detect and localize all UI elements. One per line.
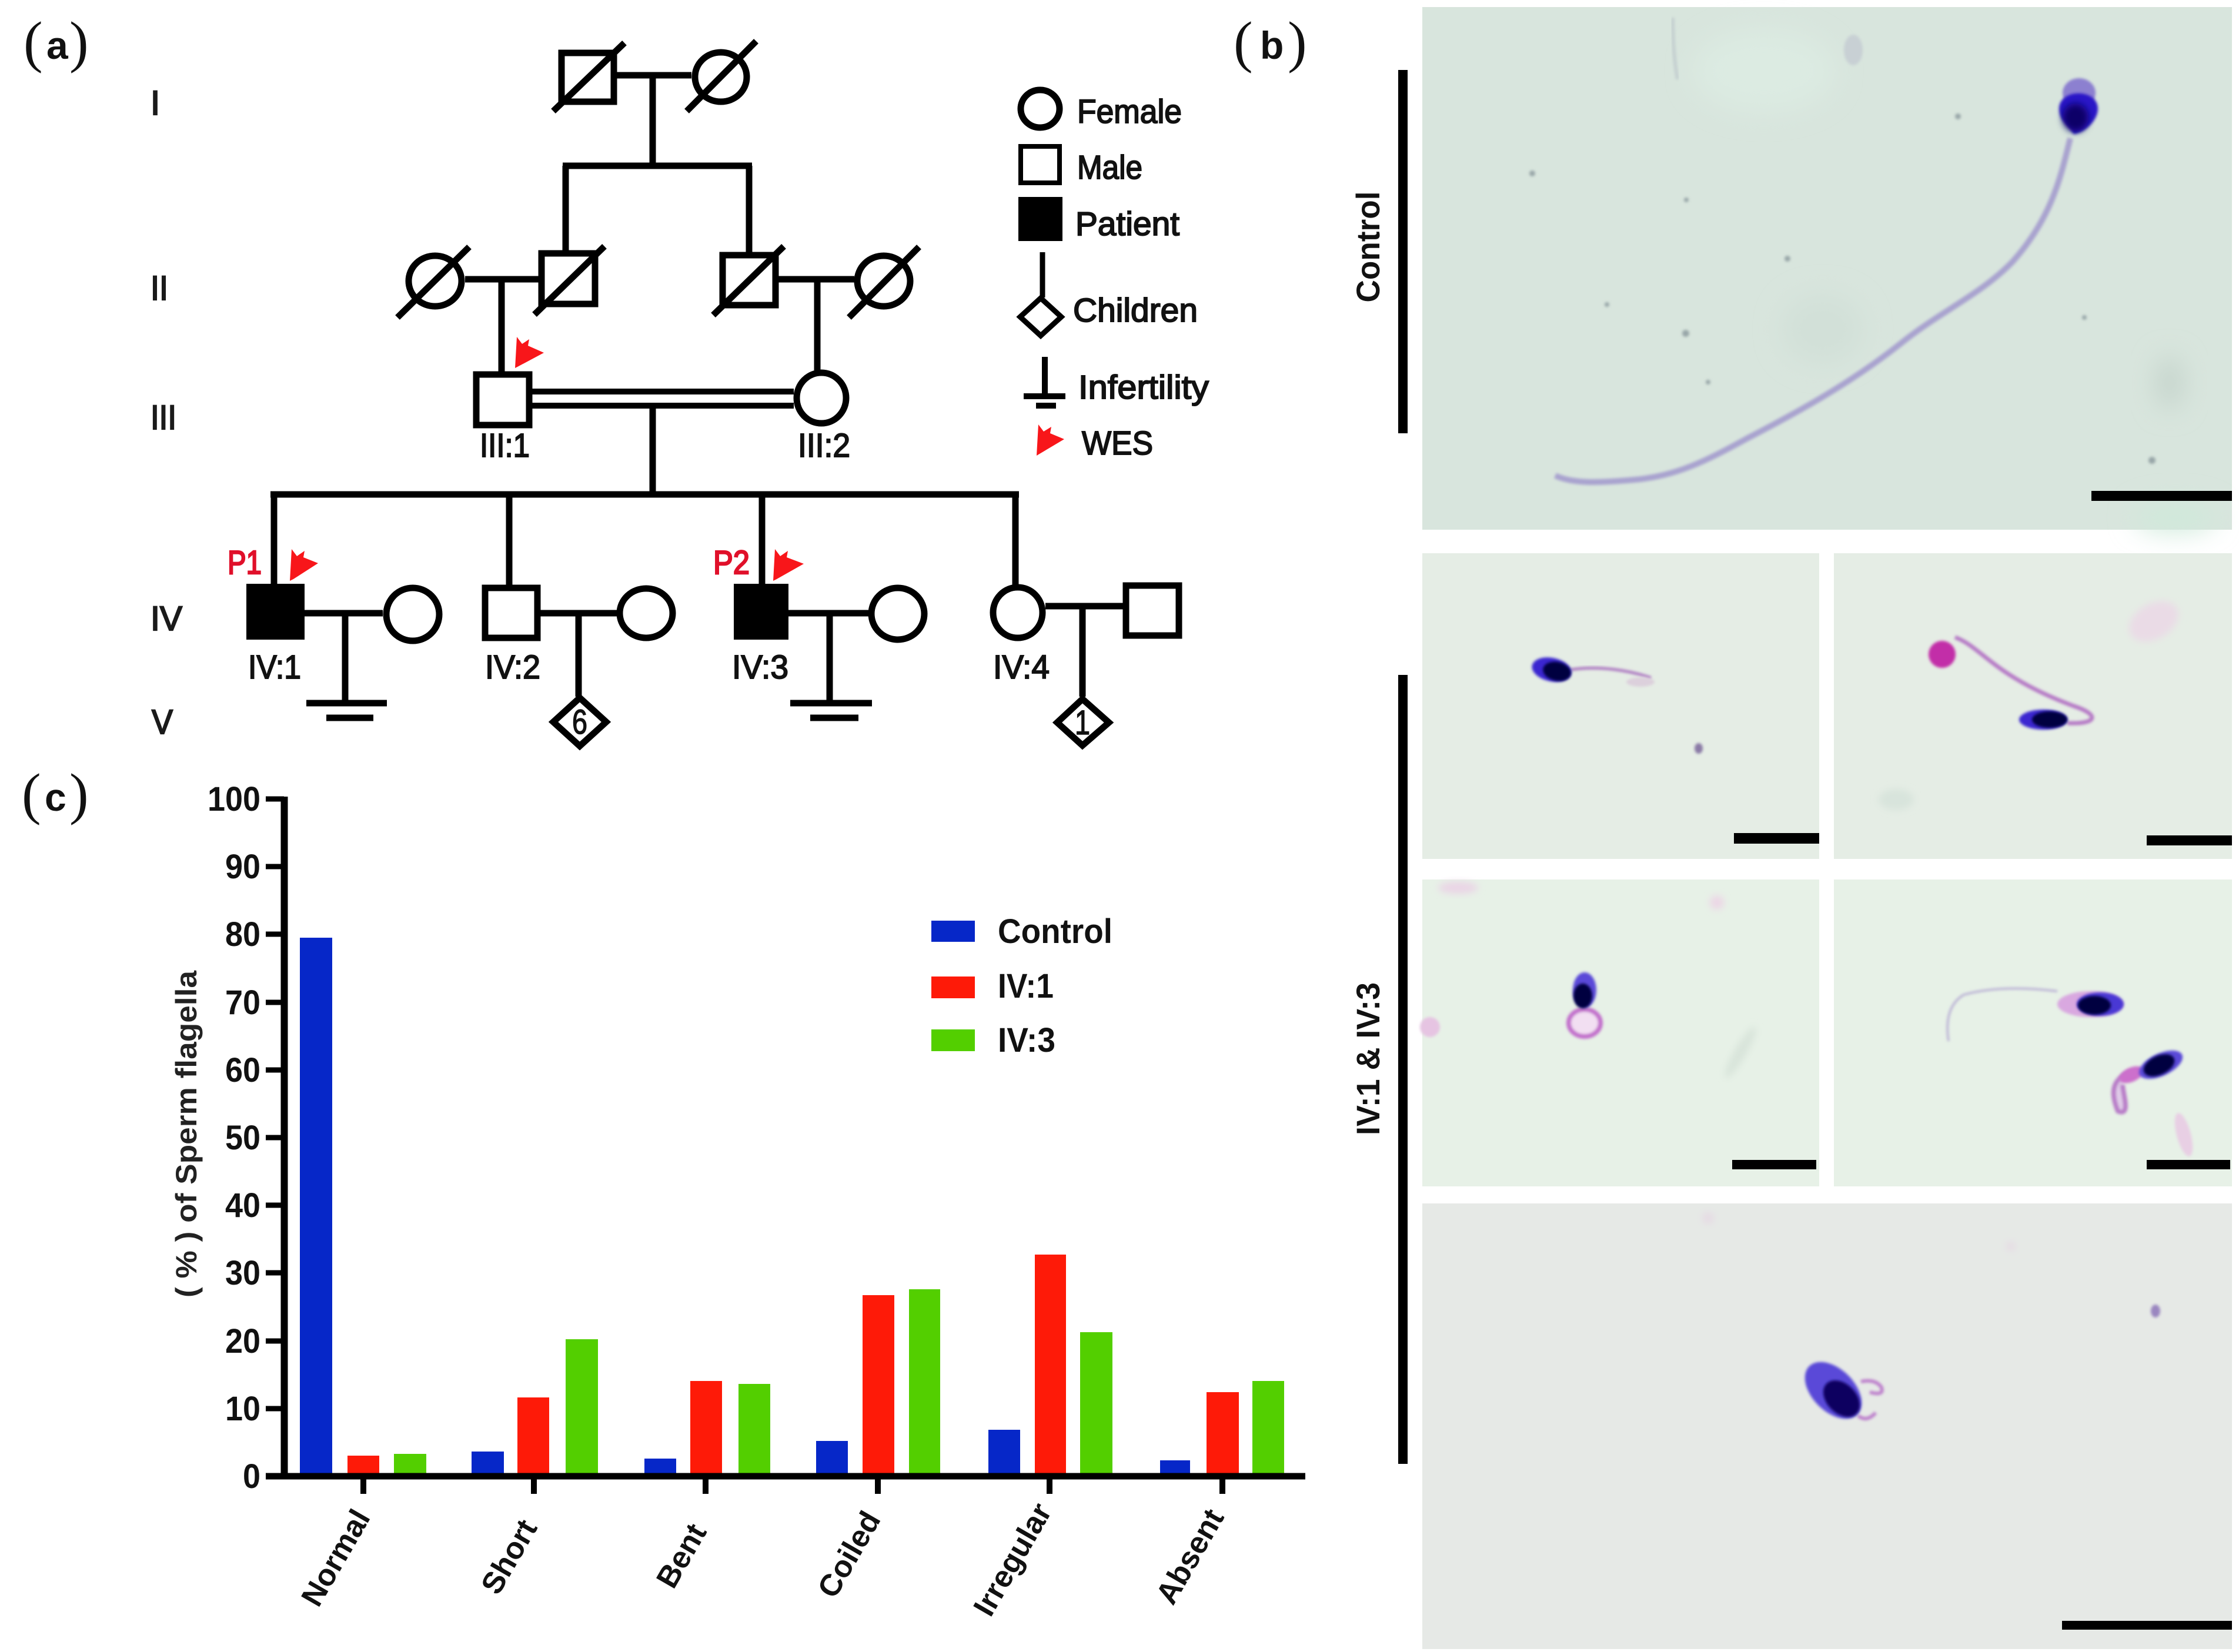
panel label (c): ) [69, 763, 89, 826]
children diamond 6 [553, 698, 606, 746]
individual labels: IV:2 [485, 648, 540, 686]
category labels: Bent [650, 1518, 713, 1594]
legend: control: Control [998, 912, 1112, 951]
chart legend [931, 912, 1112, 1059]
connecting lines [270, 75, 1123, 718]
y tick labels: 90 [225, 848, 260, 886]
group label: patients: IV:1 & IV:3 [1349, 982, 1386, 1135]
panel label (a): a [46, 24, 69, 67]
legend: children: Children [1073, 292, 1198, 329]
individual labels: IV:3 [732, 648, 788, 686]
category labels [295, 1497, 1231, 1622]
pedigree legend [1018, 90, 1209, 462]
legend: IV:1 [931, 967, 1054, 1005]
panel label (b): ) [1288, 11, 1307, 74]
proband labels P1 P2: P1 [228, 544, 262, 581]
individual labels: IV:4 [993, 648, 1050, 686]
generation labels: II [151, 269, 168, 307]
panel label (c): ( [22, 763, 41, 826]
bars: IV:1 [347, 1255, 1239, 1476]
y tick labels: 30 [225, 1254, 260, 1292]
y tick labels: 80 [225, 915, 260, 954]
micrograph: irregular flagella [1834, 879, 2232, 1186]
category labels: Normal [295, 1504, 377, 1612]
children diamond 6: 6 [572, 703, 587, 741]
children diamond 1 [1057, 699, 1109, 745]
panel label (a): ( [24, 11, 43, 74]
legend: infertility [1024, 357, 1209, 406]
y tick labels: 100 [208, 780, 260, 818]
legend: male [1021, 146, 1142, 186]
axes and ticks [266, 797, 1305, 1494]
category labels: Coiled [811, 1506, 887, 1604]
micrograph: control normal sperm [1422, 7, 2232, 532]
panel label (b): ( [1234, 11, 1253, 74]
y tick labels: 40 [225, 1186, 260, 1225]
bars: control [300, 938, 1190, 1476]
y axis title: ( % ) of Sperm flagella [170, 970, 203, 1297]
generation IV: IV:1 and spouse [246, 584, 439, 641]
category labels: Short [474, 1514, 544, 1600]
y tick labels [208, 780, 260, 1496]
legend: patient: Patient [1075, 205, 1179, 243]
individual labels: III:2 [798, 427, 850, 464]
children diamond 1: 1 [1075, 704, 1090, 742]
legend: children [1020, 252, 1198, 336]
y tick labels: 50 [225, 1119, 260, 1157]
legend: female [1021, 90, 1182, 131]
generation III couple [476, 373, 846, 425]
proband labels P1 P2 [228, 544, 750, 581]
legend: male: Male [1077, 149, 1142, 186]
generation labels: IV [151, 600, 182, 638]
micrograph: coiled flagellum [1420, 879, 1819, 1186]
panel: (b) sperm micrographs [1234, 7, 2232, 1649]
proband labels P1 P2: P2 [713, 544, 750, 581]
legend: WES [1037, 424, 1153, 462]
group bar: patients [1398, 675, 1408, 1464]
group label: control: Control [1349, 192, 1386, 302]
panel: (c) bar chart of sperm flagella [22, 763, 1305, 1622]
micrograph: absent flagellum [1422, 1203, 2232, 1649]
panel label (a): ) [69, 11, 89, 74]
category labels: Irregular [967, 1497, 1058, 1622]
micrograph: bent flagellum and detached head [1834, 553, 2232, 859]
generation labels: V [152, 703, 173, 741]
category labels: Absent [1149, 1503, 1231, 1610]
generation labels: I [151, 84, 160, 122]
generation labels [151, 84, 182, 741]
individual labels: III:1 [480, 427, 530, 464]
legend: IV:3 [931, 1021, 1055, 1059]
panel label (b): b [1260, 24, 1284, 67]
y tick labels: 20 [225, 1322, 260, 1360]
generation labels: III [151, 399, 176, 437]
y tick labels: 60 [225, 1051, 260, 1089]
individual labels: IV:1 [248, 648, 301, 686]
legend: female: Female [1077, 93, 1182, 131]
generation IV: IV:2 and spouse [485, 588, 673, 638]
panel label (a) [24, 11, 89, 74]
legend: IV:3: IV:3 [998, 1021, 1055, 1059]
generation IV: IV:3 and spouse [734, 584, 924, 640]
legend: control [931, 912, 1112, 951]
legend: WES: WES [1082, 424, 1153, 462]
generation II right couple [713, 246, 919, 317]
legend: IV:1: IV:1 [998, 967, 1054, 1005]
y tick labels: 10 [225, 1390, 260, 1428]
WES arrows [290, 337, 804, 581]
micrograph: short flagellum [1422, 553, 1819, 859]
individual labels [248, 427, 1050, 686]
panel label (c): c [45, 775, 66, 819]
generation I couple [553, 41, 756, 111]
panel label (b) [1234, 11, 1307, 74]
y tick labels: 70 [225, 984, 260, 1022]
panel label (c) [22, 763, 89, 826]
generation IV: IV:4 and spouse [993, 586, 1179, 638]
bars: IV:3 [394, 1289, 1284, 1476]
generation II left couple [397, 246, 604, 317]
group bar: control [1398, 70, 1408, 433]
y tick labels: 0 [243, 1457, 260, 1496]
legend: infertility: Infertility [1078, 369, 1209, 406]
legend: patient [1018, 197, 1179, 243]
panel: (a) pedigree [24, 11, 1209, 746]
